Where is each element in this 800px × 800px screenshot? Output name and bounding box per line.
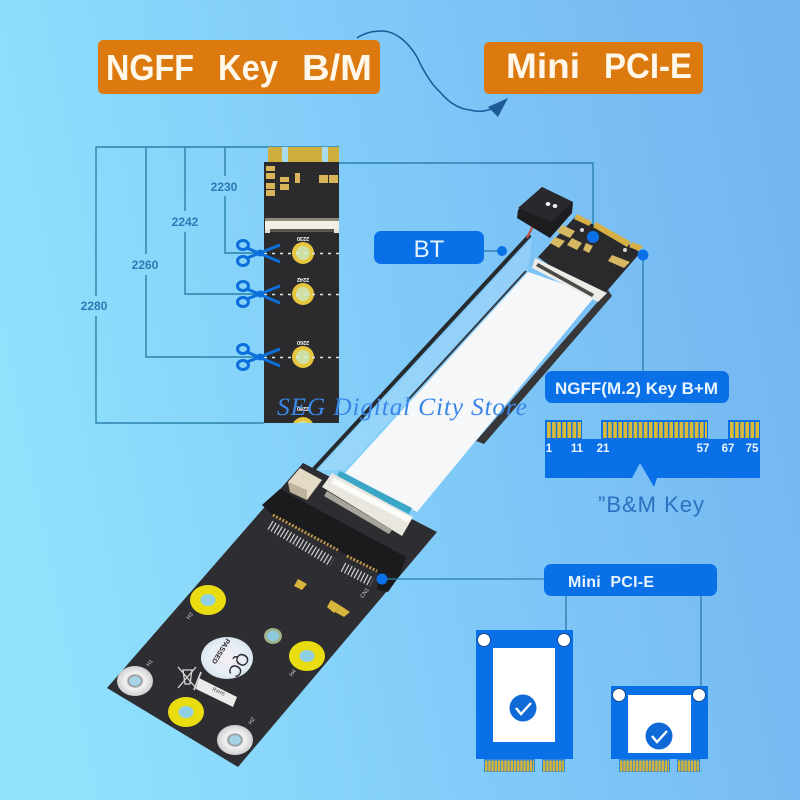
panel: diagonal M.2 extension and ribbon (behind adapter)	[313, 235, 612, 512]
FFC connector on adapter	[322, 473, 413, 536]
card: half-size Mini PCI-E	[611, 686, 708, 772]
label: Mini PCI-E with leaders	[376, 564, 717, 686]
panel: diagonal M.2 card head	[517, 187, 643, 302]
pin numbers: 1	[546, 443, 553, 455]
dimension label 2242: 2242	[172, 215, 199, 229]
title: NGFF Key B/M: Key	[218, 47, 278, 88]
small silk labels: H3	[186, 612, 195, 621]
cut marks and mounting holes: 2280	[297, 405, 309, 411]
pin numbers: 75	[746, 443, 759, 455]
contact backing	[619, 759, 700, 772]
white label: RoHS	[211, 686, 226, 698]
pin numbers: 11	[571, 443, 584, 455]
small silk labels	[146, 587, 371, 726]
cut marks and mounting holes: 2230	[297, 235, 309, 241]
M.2 card body	[538, 217, 640, 300]
white label	[196, 678, 237, 707]
small silk labels: CN1	[359, 587, 371, 600]
pin numbers: 67	[722, 443, 734, 455]
title: Mini PCI-E: PCI-E	[604, 47, 692, 86]
label: NGFF(M.2) Key B+M: NGFF(M.2) Key B+M	[555, 379, 718, 398]
thin dark stripe	[407, 271, 526, 401]
small ring	[264, 628, 282, 644]
dimension lines	[96, 147, 339, 423]
card: full-size Mini PCI-E	[476, 630, 573, 772]
contact backing	[484, 759, 565, 772]
cut marks and mounting holes	[264, 235, 339, 439]
check badge	[646, 722, 672, 750]
bluetooth black cable	[313, 235, 530, 470]
small silk labels: H2	[248, 717, 257, 726]
contact outlines	[545, 420, 760, 439]
gold pads on adapter	[294, 579, 350, 617]
recycling icon	[178, 667, 201, 690]
callout: BT	[374, 231, 507, 264]
gold contacts	[547, 422, 759, 438]
Mini PCI-E slot	[262, 489, 406, 592]
cut marks and mounting holes: 2242	[297, 276, 309, 282]
marker dot on M.2 notch	[587, 231, 599, 243]
small white wire connector	[288, 468, 322, 500]
dimension label 2280: 2280	[81, 299, 108, 313]
check badge	[510, 694, 536, 722]
QC sticker: PASSED	[210, 637, 231, 665]
M.2 silver marks	[580, 228, 627, 252]
gold edge contacts	[620, 760, 699, 772]
ribbon teal end band	[336, 471, 412, 514]
dimension label 2260: 2260	[132, 258, 159, 272]
panel: straight M.2 board	[264, 147, 339, 439]
M.2 gold fingers	[574, 214, 643, 251]
red wire stub	[527, 226, 533, 238]
arrow: conversion curve	[357, 31, 508, 117]
white flat ribbon cable	[345, 272, 596, 512]
QC sticker: QC	[224, 649, 253, 681]
title: Mini PCI-E: Mini	[506, 47, 580, 86]
dimension label 2230: 2230	[211, 180, 238, 194]
caption: B&M Key: ”B&M Key	[598, 492, 704, 517]
gold fingers	[268, 147, 339, 162]
pin numbers	[546, 443, 759, 455]
watermark: SEG Digital City Store	[277, 392, 527, 421]
title: Mini PCI-E	[484, 42, 703, 94]
FFC connector	[265, 218, 339, 233]
icon: scissors 2230	[238, 240, 280, 266]
pale cable shadow band	[318, 238, 532, 470]
BT connector housing	[517, 187, 573, 238]
label: Mini PCI-E with leaders: Mini PCI-E	[568, 574, 654, 591]
cut marks and mounting holes: 2260	[297, 339, 309, 345]
title: NGFF Key B/M: B/M	[302, 47, 372, 88]
pin numbers: 57	[697, 443, 709, 455]
key body	[545, 439, 760, 487]
diagram: B&M key pinout	[545, 420, 760, 487]
small silk labels: H1	[146, 659, 155, 668]
small silk labels: H4	[289, 669, 298, 678]
silver mounting rings	[117, 666, 253, 755]
gold edge contacts	[485, 760, 564, 772]
callout: BT: BT	[414, 236, 445, 263]
title: NGFF Key B/M: NGFF	[106, 47, 194, 88]
icon: scissors 2242	[238, 282, 280, 306]
QC sticker	[201, 637, 253, 681]
pin numbers: 21	[597, 443, 610, 455]
label: NGFF(M.2) Key B+M	[545, 371, 729, 403]
connector line from board to dot	[339, 163, 593, 237]
marker dot with leader to key label	[638, 250, 648, 371]
ribbon connector on M.2	[532, 258, 607, 302]
gold pads	[266, 166, 338, 196]
icon: scissors 2260	[238, 344, 280, 370]
yellow mounting rings	[168, 585, 325, 727]
M.2 gold pads	[550, 225, 630, 268]
panel: Mini PCI-E adapter board	[107, 463, 437, 767]
M.2 extension dark edge	[476, 290, 612, 444]
slot pins	[270, 515, 377, 582]
title: NGFF Key B/M	[98, 40, 380, 94]
